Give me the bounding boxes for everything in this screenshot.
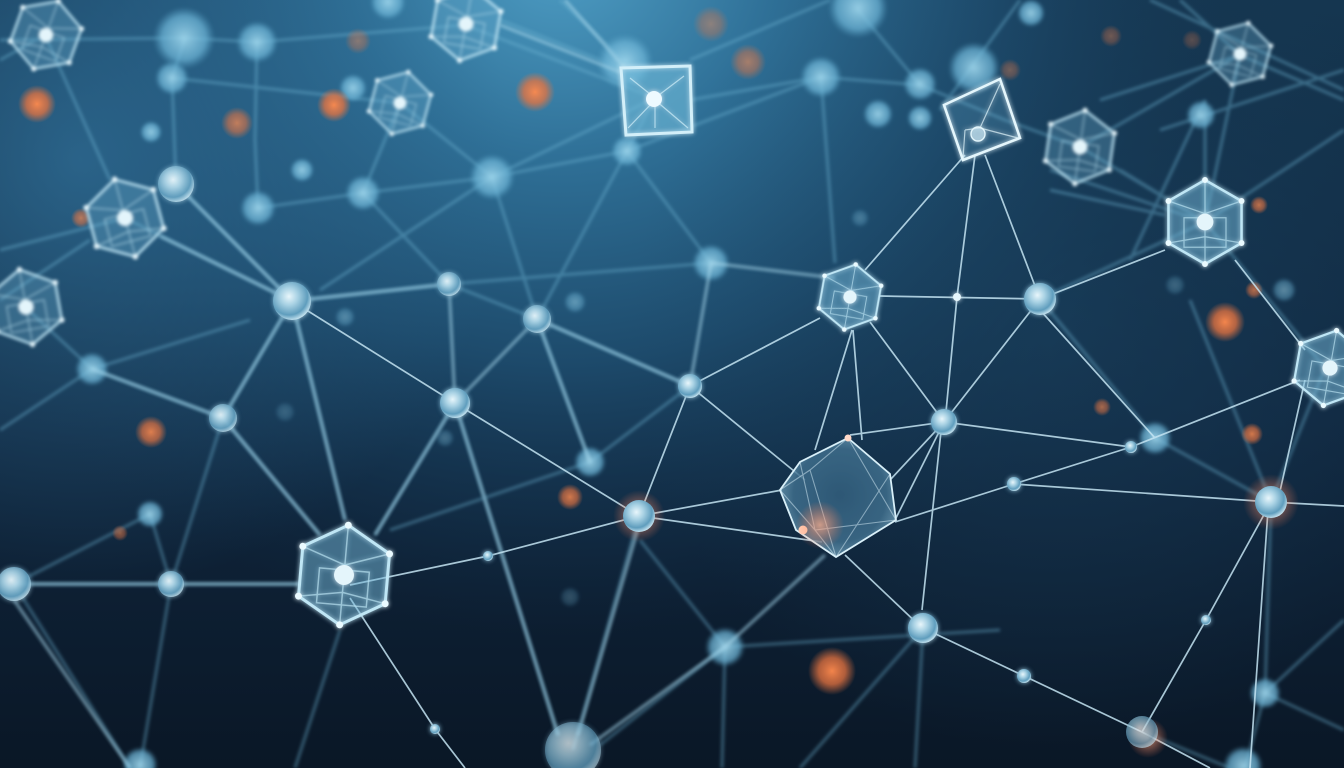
cube: top right wireframe — [944, 79, 1020, 160]
crisp network nodes — [0, 166, 1211, 768]
crystal: right — [1166, 177, 1244, 267]
crisp network edges — [292, 155, 1344, 768]
crystal polyhedra foreground — [293, 66, 1344, 632]
distant crystal polyhedra — [0, 0, 1278, 353]
mid network lines — [14, 0, 835, 768]
crystal: center top — [813, 257, 887, 337]
crystal: far right — [1288, 322, 1344, 414]
warm node glows — [613, 474, 1299, 758]
cube: top center — [621, 66, 692, 135]
crystal: lower left — [293, 518, 395, 632]
central large crystal — [780, 434, 896, 557]
